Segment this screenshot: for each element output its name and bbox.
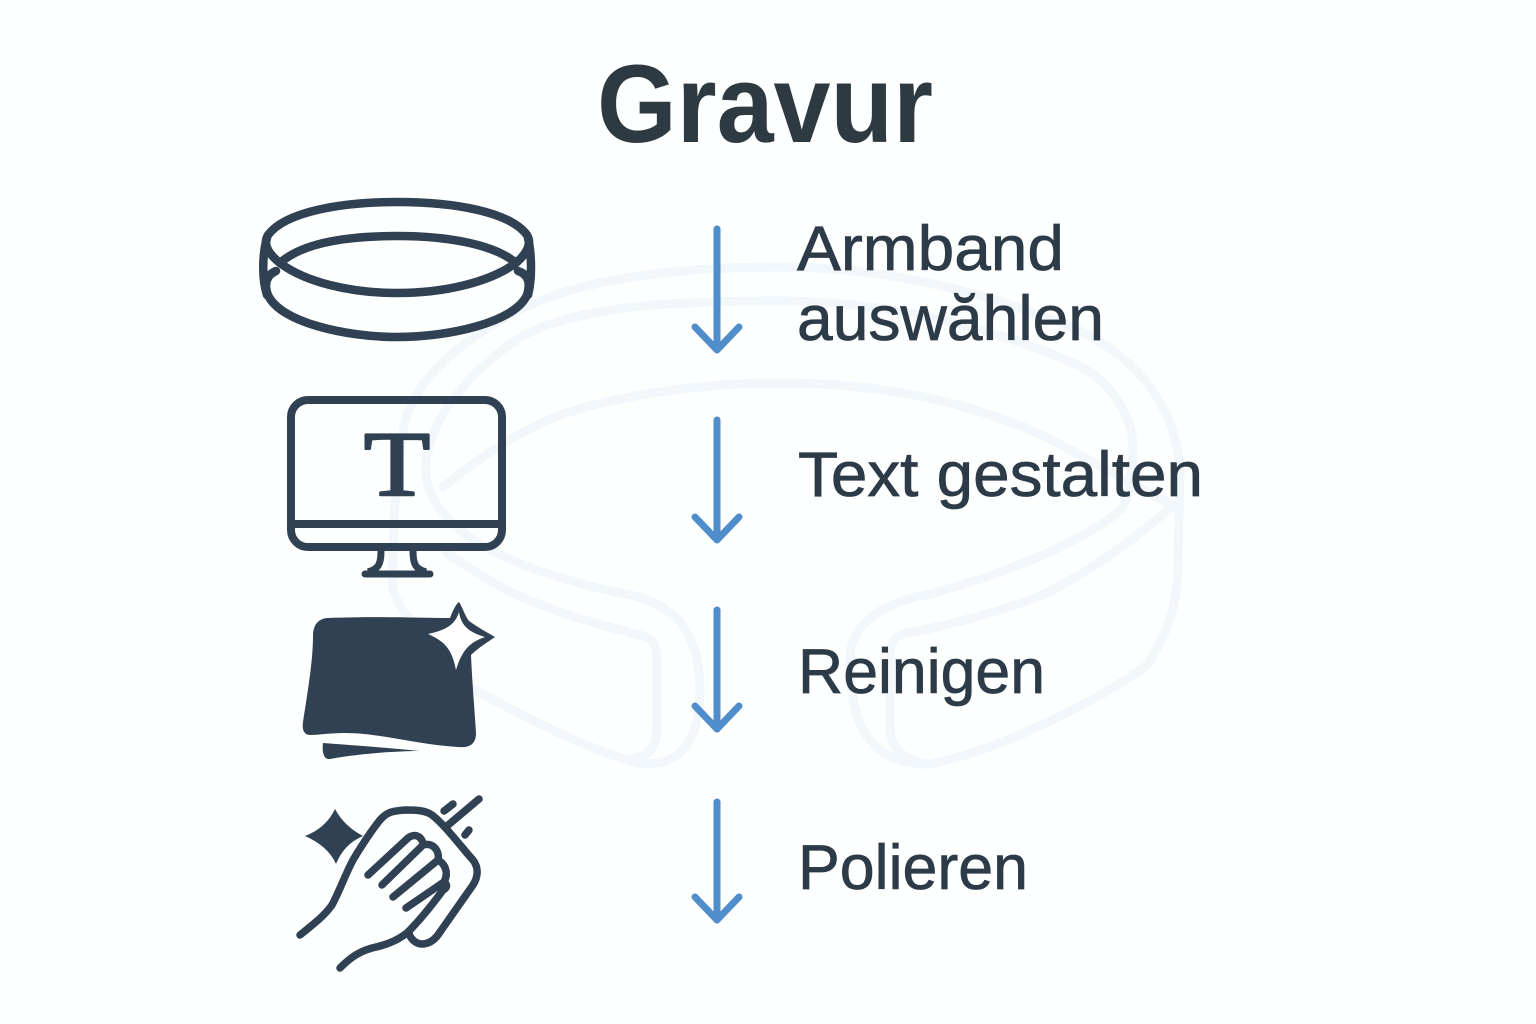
icon: polishing hand with sparkle [300,799,479,968]
step 1 label: Armband [797,214,1064,284]
step 3 label: Reinigen [798,637,1045,707]
arrow 1 [695,229,739,350]
step 1 label: auswăhlen [797,284,1104,354]
step 1 label [797,214,1104,354]
arrow 2 [695,420,739,540]
icon: monitor with T [291,400,502,574]
T glyph: T [364,413,430,515]
icon: cleaning cloth with sparkle [303,602,495,759]
title: Gravur [597,43,933,166]
watermark: bracelet outline [393,267,1180,764]
arrow 4 [695,802,739,920]
icon: bracelet [263,202,531,337]
step 2 label: Text gestalten [798,440,1203,510]
step 4 label: Polieren [798,833,1028,903]
arrow 3 [695,610,739,729]
